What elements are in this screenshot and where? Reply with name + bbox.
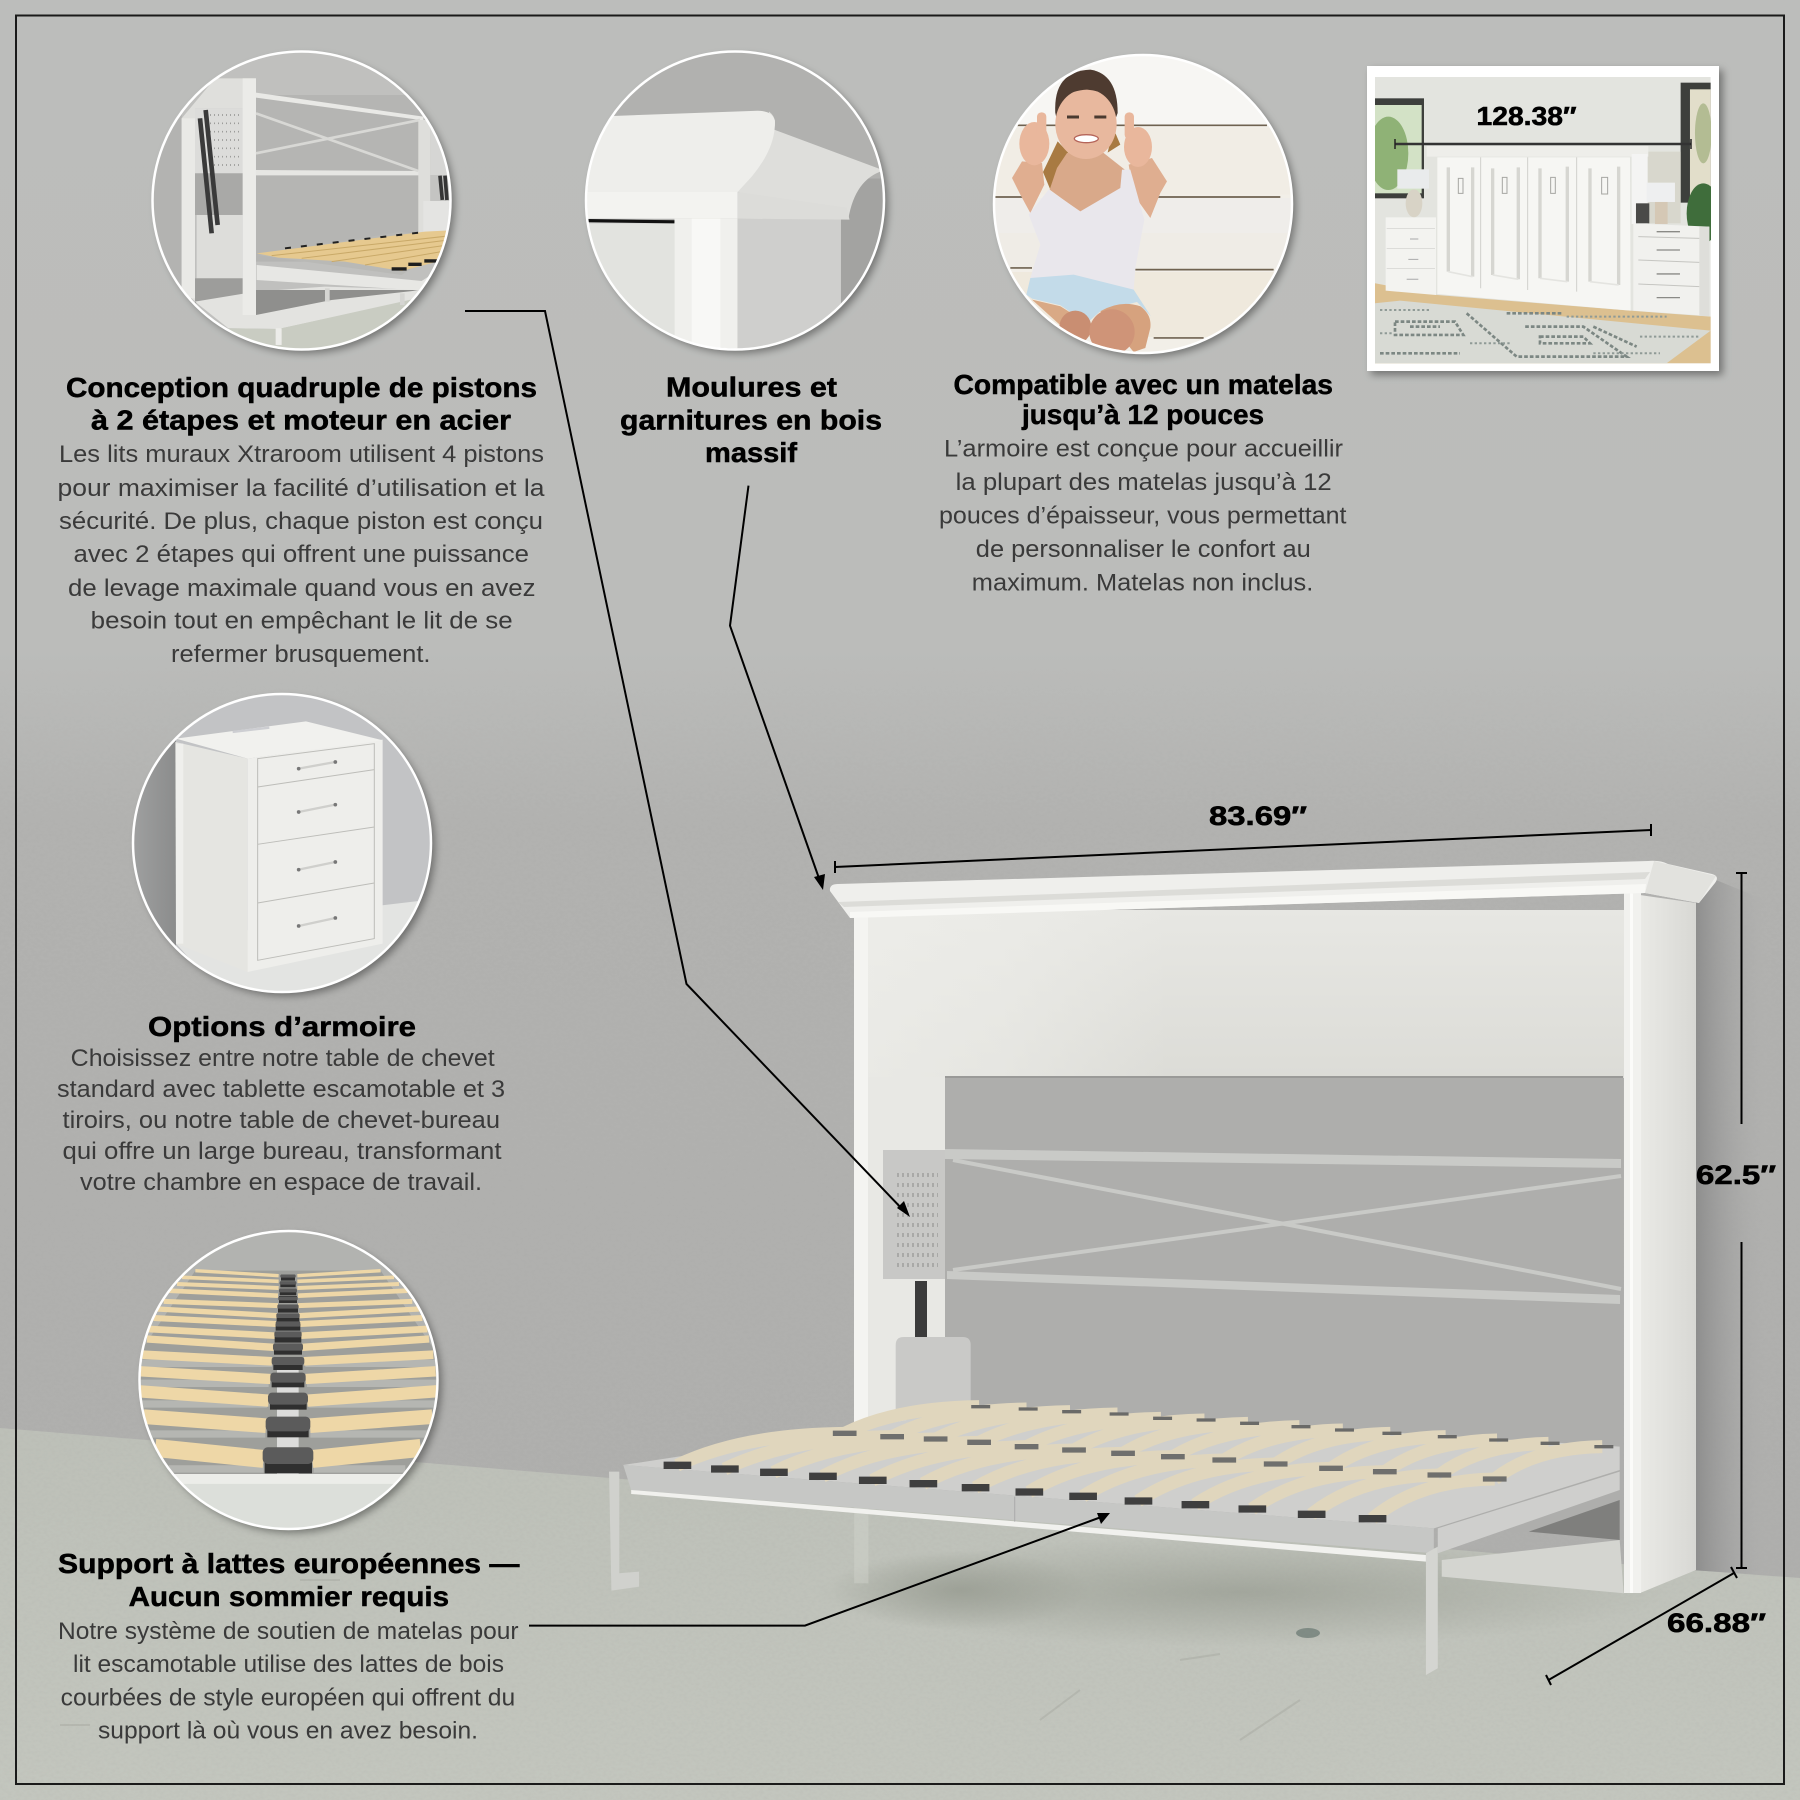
front face — [623, 1465, 1434, 1553]
icon: crown moulding circle photo — [580, 45, 890, 357]
text block: mattress: pouces d’épaisseur, vous permettant — [939, 502, 1347, 530]
shorts — [1026, 275, 1151, 323]
text block: mattress: jusqu’à 12 pouces — [1021, 399, 1264, 430]
arrow: slats callout leader — [529, 1513, 1110, 1626]
nightstand top — [176, 721, 383, 759]
piston — [915, 1281, 927, 1339]
wood slats — [139, 1271, 437, 1459]
arrow: piston callout leader — [465, 311, 910, 1217]
text block: mattress: maximum. Matelas non inclus. — [972, 570, 1313, 596]
pegboard — [195, 108, 243, 173]
stacked mattresses — [987, 48, 1299, 360]
dimension: height: 62.5″ — [1696, 1160, 1776, 1190]
wall bed doors — [1437, 157, 1631, 311]
text block: mouldings: garnitures en bois — [620, 404, 882, 436]
drawer lines — [258, 744, 374, 960]
slat end caps — [664, 1462, 1386, 1522]
text block: mattress: L’armoire est conçue pour accueillir — [944, 436, 1343, 462]
text block: pistons: Conception quadruple de pistons — [66, 372, 537, 403]
text block: pistons: avec 2 étapes qui offrent une puissance — [74, 541, 529, 568]
text block: pistons: de levage maximale quand vous en avez — [68, 575, 536, 602]
wall seen through cabinet — [945, 1077, 1623, 1538]
text block: pistons: Les lits muraux Xtraroom utilisent 4 pistons — [59, 441, 544, 468]
beige wall — [1647, 152, 1681, 223]
rug — [1375, 301, 1711, 363]
text block: european slats: Notre système de soutien de matelas pour — [58, 1618, 519, 1645]
panel: room photo with total width — [1367, 66, 1720, 371]
feet — [1059, 311, 1091, 344]
text block: mattress: de personnaliser le confort au — [976, 536, 1311, 563]
dimension: depth — [1546, 1567, 1766, 1685]
panel: room photo with total width: 128.38″ — [1476, 101, 1576, 131]
face — [1055, 89, 1117, 159]
text block: cabinet options: Options d’armoire — [148, 1011, 416, 1042]
arms — [1012, 161, 1044, 213]
deck surface — [623, 1407, 1620, 1528]
icon: slat system circle photo — [132, 1224, 444, 1536]
text block: pistons: besoin tout en empêchant le lit de se — [91, 608, 513, 634]
total width line — [1395, 143, 1691, 145]
hands — [1019, 122, 1049, 165]
wall bed cabinet — [830, 861, 1765, 1593]
main post — [243, 78, 256, 315]
text block: cabinet options: tiroirs, ou notre table de chevet-bureau — [62, 1107, 500, 1134]
wood slats — [677, 1433, 1495, 1519]
text block: european slats: Support à lattes européennes — — [58, 1548, 520, 1579]
arrow: moulding callout leader — [730, 486, 825, 890]
bed frame — [257, 262, 452, 291]
top moulding — [1427, 146, 1648, 157]
legs — [609, 1472, 639, 1591]
icon: woman on mattress circle photo — [987, 48, 1299, 360]
cabinet shadow on wall — [1691, 880, 1765, 1575]
side rail — [1438, 1472, 1620, 1553]
text block: cabinet options — [57, 1011, 505, 1196]
right side post — [1640, 895, 1696, 1593]
dimension: width: 83.69″ — [1209, 801, 1307, 831]
nightstand side — [175, 742, 248, 972]
pistons — [200, 110, 218, 233]
lift mechanism plate — [896, 1337, 971, 1420]
text block: pistons: refermer brusquement. — [171, 641, 430, 668]
text block: pistons — [58, 372, 545, 668]
text block: mouldings: massif — [705, 437, 798, 468]
right nightstand — [1633, 223, 1709, 316]
text block: european slats: Aucun sommier requis — [129, 1581, 449, 1612]
left inner side panel — [868, 1077, 945, 1425]
crown molding — [830, 861, 1717, 918]
text block: pistons: sécurité. De plus, chaque piston est conçu — [59, 508, 543, 535]
interior back panel — [868, 910, 1624, 1078]
text block: mattress: la plupart des matelas jusqu’à 12 — [956, 469, 1332, 496]
base — [195, 287, 435, 329]
neck and chest — [1050, 153, 1127, 212]
text block: pistons: pour maximiser la facilité d’utilisation et la — [58, 475, 545, 502]
hair — [1055, 70, 1118, 128]
text block: mattress — [939, 369, 1347, 596]
text block: european slats: courbées de style européen qui offrent du — [61, 1684, 515, 1712]
icon: piston mechanism circle photo — [145, 45, 457, 357]
icon: nightstand circle photo — [126, 687, 438, 999]
cabinet base behind bed — [1442, 1540, 1624, 1593]
frame — [256, 93, 423, 120]
left nightstand — [1386, 217, 1436, 295]
nightstand front — [248, 740, 383, 972]
legs — [1032, 300, 1087, 331]
bed column — [1632, 154, 1648, 224]
text block: cabinet options: standard avec tablette escamotable et 3 — [57, 1076, 505, 1103]
tank top — [1029, 170, 1144, 291]
dimension: depth: 66.88″ — [1667, 1608, 1766, 1638]
text block: cabinet options: Choisissez entre notre table de chevet — [71, 1045, 495, 1072]
handles — [299, 762, 335, 926]
windows — [1375, 98, 1424, 198]
text block: mouldings — [620, 372, 882, 468]
text block: mouldings: Moulures et — [666, 372, 837, 402]
dimension: width — [835, 801, 1651, 873]
text block: european slats — [58, 1548, 520, 1744]
gray under-slat bands — [132, 1271, 444, 1474]
deck under slats — [257, 232, 452, 275]
text block: mattress: Compatible avec un matelas — [954, 369, 1333, 400]
text block: cabinet options: votre chambre en espace de travail. — [80, 1169, 482, 1196]
text block: european slats: support là où vous en avez besoin. — [98, 1718, 478, 1744]
right front molding — [1624, 890, 1641, 1593]
lamps — [1397, 169, 1429, 189]
perforated piston plate — [883, 1150, 945, 1279]
text block: cabinet options: qui offre un large bureau, transformant — [62, 1138, 502, 1165]
text block: european slats: lit escamotable utilise des lattes de bois — [73, 1651, 504, 1678]
bed rail and floor — [132, 1474, 444, 1484]
ghost cabinet leg — [854, 1507, 868, 1583]
left front molding — [854, 915, 868, 1425]
fold-down bed frame with slats — [609, 1405, 1624, 1675]
center rail dark clips — [265, 1275, 312, 1473]
text block: pistons: à 2 étapes et moteur en acier — [91, 404, 511, 436]
frame bars and cross bracing — [945, 1149, 1621, 1304]
background: concrete floor — [0, 1428, 1800, 1800]
floor — [1375, 283, 1711, 363]
bed slats — [257, 230, 457, 271]
